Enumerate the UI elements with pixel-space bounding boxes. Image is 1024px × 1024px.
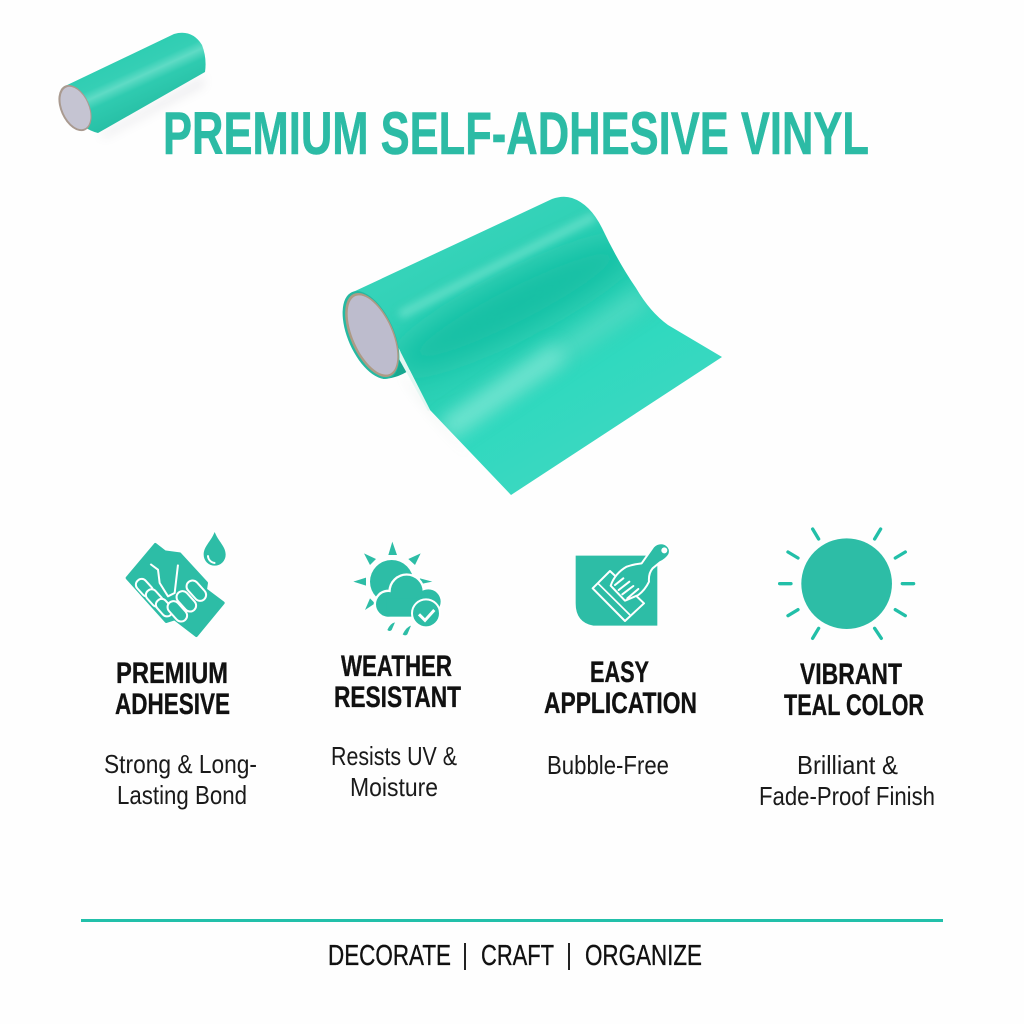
large vinyl roll	[331, 197, 722, 495]
description line: fade-proof finish: Fade-Proof Finish	[759, 781, 935, 811]
footer tagline: DECORATE	[328, 940, 451, 972]
heading line: application: APPLICATION	[544, 687, 697, 720]
heading: weather: WEATHER	[341, 650, 452, 683]
feature: weather resistant	[331, 542, 461, 802]
description line: lasting bond: Lasting Bond	[117, 780, 247, 810]
heading line: resistant: RESISTANT	[334, 681, 461, 714]
icon: squeegee on vinyl sheet	[576, 543, 670, 626]
icon: fist gripping with drop	[127, 532, 226, 635]
feature: easy application	[544, 543, 697, 780]
description: resists uv: Resists UV &	[331, 741, 457, 771]
feature: premium adhesive	[104, 532, 257, 810]
description: bubble-free: Bubble-Free	[547, 750, 669, 780]
heading: vibrant: VIBRANT	[800, 658, 902, 691]
icon: sun and cloud with check	[353, 542, 441, 635]
heading line: adhesive: ADHESIVE	[115, 688, 230, 721]
description line: moisture: Moisture	[350, 772, 438, 802]
icon: sun	[780, 529, 914, 638]
feature: vibrant teal color	[759, 529, 935, 811]
footer tagline: CRAFT	[481, 940, 554, 972]
small vinyl roll	[52, 33, 206, 138]
heading line: teal color: TEAL COLOR	[784, 689, 924, 722]
description: brilliant: Brilliant &	[797, 750, 898, 780]
footer tagline: ORGANIZE	[585, 940, 702, 972]
description: strong bond: Strong & Long-	[104, 749, 257, 779]
heading: premium: PREMIUM	[116, 657, 228, 690]
heading: easy: EASY	[590, 656, 649, 689]
footer tagline	[328, 940, 702, 972]
